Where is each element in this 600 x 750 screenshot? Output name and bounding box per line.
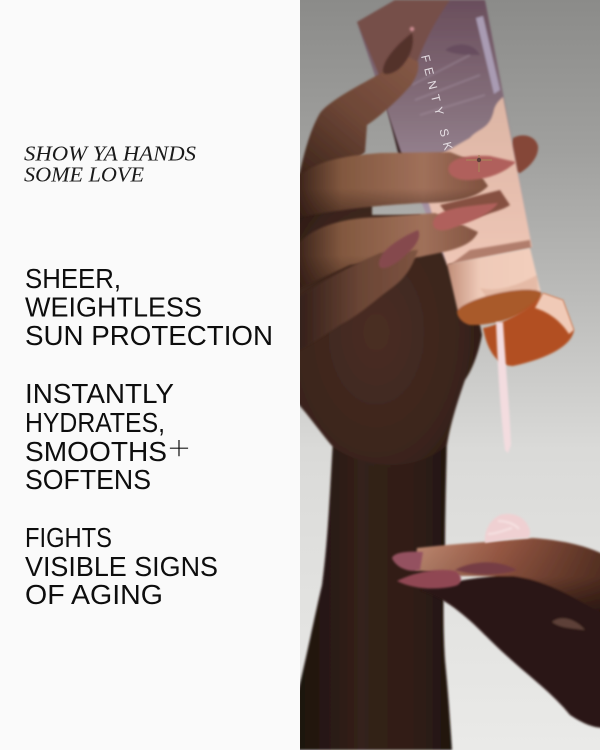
tube label: fenty skin: FENTY SK (418, 53, 457, 157)
forearm and palm (290, 100, 482, 750)
product tube (357, 0, 532, 265)
flip lid (483, 293, 574, 366)
heading: show ya hands some love: SHOW YA HANDS (24, 142, 197, 166)
tube cap (447, 248, 541, 325)
benefit: fights visible signs of aging: OF AGING (25, 579, 163, 610)
cream dollop (485, 514, 530, 543)
benefit: fights visible signs of aging: VISIBLE SIGNS (25, 551, 218, 582)
lower hand nails (392, 552, 517, 589)
heading: show ya hands some love (24, 142, 197, 186)
benefit: fights visible signs of aging: FIGHTS (25, 522, 112, 553)
benefit: sheer weightless sun protection (25, 263, 273, 351)
benefit: instantly hydrates, smooths and softens (25, 378, 191, 495)
middle finger nail with gold cross (448, 155, 516, 180)
ring finger nail (433, 203, 498, 230)
benefit: sheer weightless sun protection: SUN PROTECTION (25, 320, 273, 351)
fingertip and nail behind tube (505, 135, 538, 173)
thumb nail (383, 27, 414, 74)
pinky finger (301, 250, 418, 336)
photo panel: hands and tube (290, 0, 600, 750)
lower cupped hand (415, 538, 600, 728)
benefit: sheer weightless sun protection: SHEER, (25, 263, 121, 294)
pinky nail (379, 230, 419, 268)
benefit: sheer weightless sun protection: WEIGHTLESS (25, 292, 202, 323)
benefit: instantly hydrates, smooths and softens: HYDRATES, (25, 407, 165, 438)
thumb (300, 58, 419, 176)
heading: show ya hands some love: SOME LOVE (24, 162, 144, 186)
middle finger (295, 152, 488, 218)
benefit: instantly hydrates, smooths and softens: SOFTENS (25, 464, 151, 495)
benefit: fights visible signs of aging (25, 522, 218, 610)
finger shadow on tube (439, 188, 511, 218)
ring finger (295, 213, 478, 290)
cream stream (496, 322, 511, 453)
benefit: instantly hydrates, smooths and softens: SMOOTHS (25, 436, 167, 467)
left text panel background (0, 0, 300, 750)
benefit: instantly hydrates, smooths and softens: INSTANTLY (25, 378, 174, 409)
benefit: instantly hydrates, smooths and softens: + (167, 427, 191, 468)
